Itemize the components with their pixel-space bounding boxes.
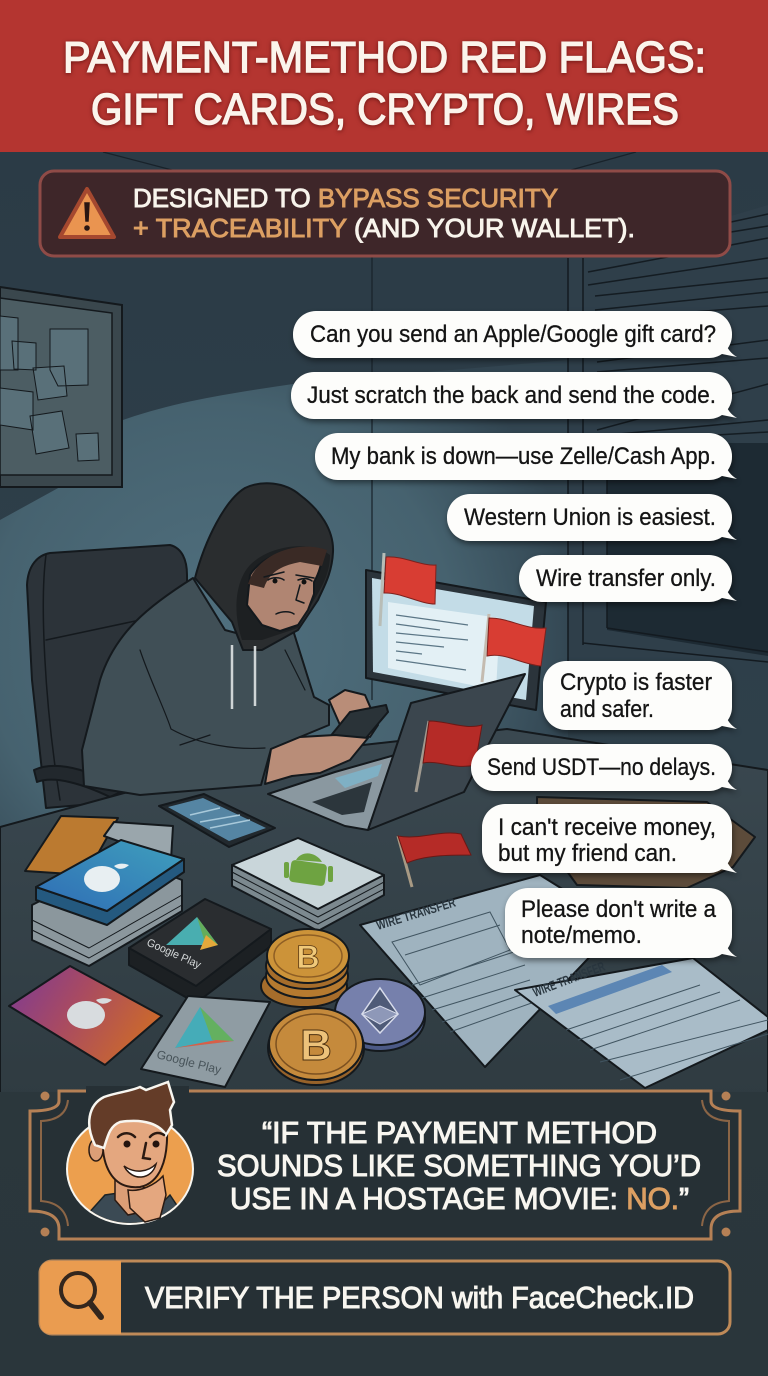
- phone on desk: [159, 794, 275, 847]
- near hand: [265, 735, 368, 784]
- quote panel: [30, 1086, 740, 1239]
- speech bubble 1: Can you send an Apple/Google gift card?: [310, 321, 716, 348]
- speech bubble 7: [471, 744, 737, 791]
- phone in hand: [329, 705, 388, 738]
- footer background: [0, 1092, 768, 1376]
- speech bubble 9: [505, 888, 737, 958]
- avatar of presenter: [66, 1082, 194, 1225]
- icon: magnifying glass: [61, 1273, 101, 1317]
- gift card: silver card: [104, 822, 173, 860]
- speech bubble 7: Send USDT—no delays.: [487, 754, 716, 781]
- corkboard: [0, 287, 122, 487]
- banner line one: DESIGNED TO BYPASS SECURITY: [133, 183, 558, 213]
- speech bubble 4: Western Union is easiest.: [464, 504, 716, 531]
- banner line two: + TRACEABILITY (AND YOUR WALLET).: [133, 213, 635, 243]
- icon: android robot: [284, 853, 333, 886]
- icon: play triangle: [166, 917, 218, 950]
- hood opening: [236, 546, 330, 640]
- speech bubble 9: note/memo.: [521, 922, 642, 949]
- neck and face: [115, 1175, 150, 1215]
- icon: warning triangle: [60, 189, 114, 237]
- title: PAYMENT-METHOD RED FLAGS:: [63, 33, 706, 82]
- hoodie folds: [140, 650, 305, 748]
- gift card: orange crypto card: [25, 816, 118, 875]
- desk: [0, 729, 768, 1100]
- header band: [0, 0, 768, 152]
- monitor with red flags: [366, 553, 546, 710]
- wire transfer form back: WIRE TRANSFER: [374, 894, 458, 933]
- speech bubble 3: My bank is down—use Zelle/Cash App.: [331, 443, 716, 470]
- red flag on monitor right: [482, 614, 546, 682]
- laptop keyboard: [312, 782, 372, 815]
- shirt: [90, 1192, 177, 1223]
- quote line one: “IF THE PAYMENT METHOD: [262, 1115, 657, 1150]
- red flag on desk: [398, 833, 471, 887]
- speech bubble 8: but my friend can.: [498, 840, 677, 867]
- google play label: Google Play: [155, 1047, 223, 1077]
- bitcoin coin single: B: [300, 1021, 332, 1070]
- cardboard box: [537, 797, 755, 888]
- bitcoin coin single: [268, 1008, 364, 1085]
- wire transfer form back: [360, 875, 620, 1067]
- speech bubble 6: [543, 661, 737, 730]
- quote line two: SOUNDS LIKE SOMETHING YOU’D: [217, 1148, 701, 1183]
- speech bubble 8: [482, 804, 737, 873]
- hair: [89, 1082, 174, 1148]
- speech bubble 2: Just scratch the back and send the code.: [307, 382, 716, 409]
- wire transfer form front: [515, 958, 768, 1088]
- hood: [195, 483, 333, 650]
- bitcoin coin stack: B: [296, 939, 320, 975]
- drawstrings: [232, 645, 255, 709]
- laptop lid: [368, 674, 525, 830]
- quote line three: USE IN A HOSTAGE MOVIE: NO.”: [230, 1181, 689, 1216]
- icon panel: [40, 1261, 121, 1334]
- laptop: [268, 674, 525, 830]
- wire transfer form front: WIRE TRANSFER: [531, 958, 607, 1000]
- icon: apple logo silver: [67, 998, 112, 1029]
- speech bubble 3: [315, 433, 737, 480]
- speech bubble 8: I can't receive money,: [498, 814, 716, 841]
- room lines: [0, 152, 636, 700]
- speech bubble 2: [291, 372, 737, 419]
- speech bubble 6: and safer.: [560, 696, 654, 723]
- speech bubble 9: Please don't write a: [521, 896, 717, 923]
- title: GIFT CARDS, CRYPTO, WIRES: [91, 85, 679, 134]
- far hand: [329, 690, 378, 737]
- gift card stack: android white: [232, 838, 384, 931]
- verify bar: [40, 1261, 730, 1334]
- hoodie body: [82, 578, 329, 795]
- laptop base: [268, 755, 395, 830]
- eyes brows nose mouth: [264, 572, 314, 614]
- gift card stack: google play black: [129, 899, 271, 1003]
- speech bubble 1: [293, 311, 737, 358]
- speech bubble 6: Crypto is faster: [560, 669, 712, 696]
- google play label: Google Play: [145, 937, 203, 972]
- lit wall patch: [0, 360, 568, 830]
- office chair: [27, 545, 187, 808]
- hooded man at desk: [82, 483, 388, 795]
- verify text: VERIFY THE PERSON with FaceCheck.ID: [145, 1280, 694, 1315]
- red flag on monitor left: [380, 553, 436, 626]
- eyes brows nose smile: [118, 1133, 164, 1159]
- hand on chin: [128, 1176, 166, 1222]
- hair: [248, 547, 327, 588]
- speech bubble 4: [447, 494, 737, 541]
- laptop trackpad: [335, 764, 382, 788]
- title: [63, 33, 706, 134]
- red flag on laptop: [416, 721, 482, 792]
- speech bubble 5: [519, 555, 737, 602]
- bitcoin coin stack: [261, 929, 349, 1007]
- warning banner: [40, 171, 730, 256]
- speech bubble 5: Wire transfer only.: [536, 565, 716, 592]
- ethereum coin: [335, 979, 425, 1051]
- gift card stack: apple blue: [32, 840, 184, 966]
- icon: play triangle: [175, 1007, 234, 1048]
- gift card: google play gray: [141, 996, 270, 1087]
- window with blinds: [568, 205, 768, 664]
- gift card: apple purple orange: [9, 966, 162, 1065]
- icon: apple logo white: [84, 864, 129, 892]
- face: [247, 550, 322, 631]
